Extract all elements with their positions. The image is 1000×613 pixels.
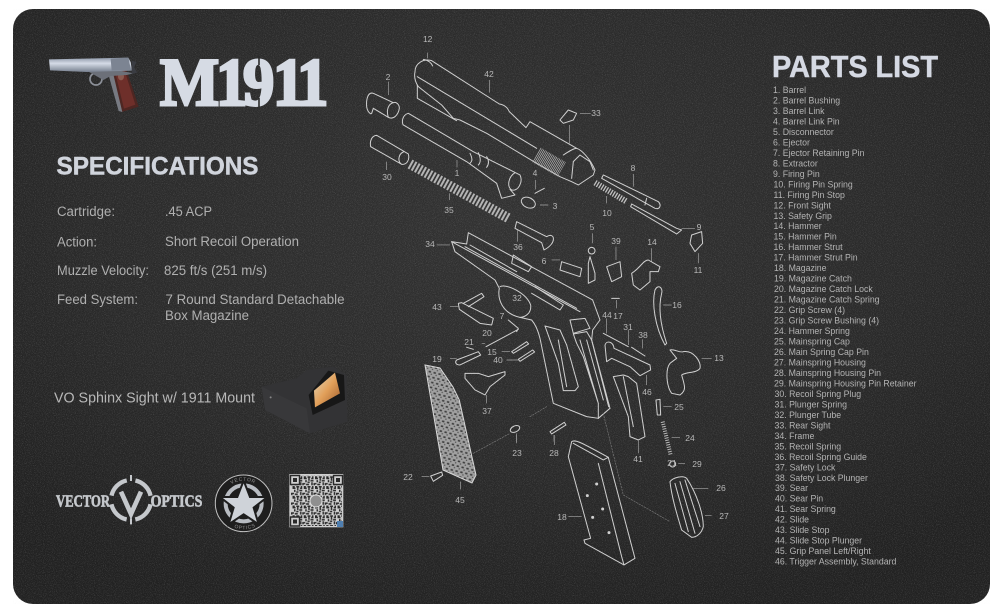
part number labels: 19 bbox=[432, 354, 442, 364]
part number labels: 5 bbox=[590, 222, 595, 232]
parts list: 31. Plunger Spring bbox=[774, 399, 847, 409]
part: recoil spring plug bbox=[370, 135, 409, 164]
part number labels: 29 bbox=[692, 459, 702, 469]
part: recoil spring guide bbox=[515, 222, 553, 250]
frame and lower parts group bbox=[450, 233, 712, 455]
part number labels bbox=[382, 34, 729, 522]
part: slide stop bbox=[458, 293, 493, 325]
part number labels: 26 bbox=[716, 483, 726, 493]
part: barrel bbox=[402, 113, 521, 198]
part number labels: 2 bbox=[386, 72, 391, 82]
parts list: 5. Disconnector bbox=[773, 127, 834, 137]
parts list: 14. Hammer bbox=[774, 221, 822, 231]
parts list: 42. Slide bbox=[775, 515, 809, 525]
parts list: 39. Sear bbox=[775, 483, 808, 493]
part number labels: 17 bbox=[613, 311, 623, 321]
part number labels: 35 bbox=[444, 205, 454, 215]
parts list: 19. Magazine Catch bbox=[774, 274, 852, 284]
parts list: 9. Firing Pin bbox=[773, 169, 820, 179]
part: barrel link pin bbox=[535, 188, 544, 193]
exploded parts diagram bbox=[367, 34, 729, 565]
part: magazine catch bbox=[456, 347, 481, 365]
part number labels: 3 bbox=[553, 201, 558, 211]
parts list: 44. Slide Stop Plunger bbox=[775, 536, 862, 546]
part number labels: 46 bbox=[642, 387, 652, 397]
part: recoil spring bbox=[410, 164, 509, 219]
part number labels: 21 bbox=[667, 458, 677, 468]
part: frame bbox=[452, 233, 610, 418]
spec: feed system: Feed System: bbox=[57, 292, 138, 307]
title: M1911: M1911 bbox=[160, 46, 328, 121]
parts list: 40. Sear Pin bbox=[775, 494, 823, 504]
parts list: 27. Mainspring Housing bbox=[774, 358, 866, 368]
part: extractor bbox=[602, 175, 660, 209]
assembly guide lines bbox=[473, 407, 670, 522]
part: grip screw bbox=[431, 472, 443, 481]
parts list: 1. Barrel bbox=[773, 85, 806, 95]
spec: feed system: Box Magazine bbox=[165, 308, 249, 323]
QR code bbox=[289, 474, 343, 527]
spec: cartridge: .45 ACP bbox=[165, 204, 212, 219]
part number labels: 32 bbox=[512, 293, 522, 303]
part: mainspring housing bbox=[670, 477, 703, 537]
parts list: 26. Main Spring Cap Pin bbox=[774, 347, 869, 357]
part number labels: 27 bbox=[719, 511, 729, 521]
spec: feed system bbox=[57, 292, 344, 323]
spec: action bbox=[57, 234, 299, 250]
logo wordmark left: VECTOR bbox=[56, 492, 111, 511]
part: retainer bbox=[670, 461, 676, 467]
heading: specifications: SPECIFICATIONS bbox=[56, 152, 258, 180]
badge: star emblem: OPTICS bbox=[234, 524, 255, 530]
leader lines bbox=[450, 300, 712, 453]
part: plunger pins bbox=[603, 298, 645, 356]
parts list: 10. Firing Pin Spring bbox=[774, 179, 853, 189]
parts list: 46. Trigger Assembly, Standard bbox=[775, 557, 897, 567]
parts list: 4. Barrel Link Pin bbox=[773, 116, 840, 126]
part number labels: 11 bbox=[694, 265, 703, 275]
part: hammer strut bbox=[654, 287, 667, 345]
part number labels: 33 bbox=[591, 108, 601, 118]
part: firing pin bbox=[631, 204, 682, 234]
part number labels: 23 bbox=[512, 448, 522, 458]
part: disconnector bbox=[588, 247, 595, 283]
part number labels: 6 bbox=[542, 256, 547, 266]
part number labels: 7 bbox=[500, 311, 505, 321]
parts list: 21. Magazine Catch Spring bbox=[774, 295, 880, 305]
spec: action: Short Recoil Operation bbox=[165, 234, 299, 249]
part number labels: 21 bbox=[464, 337, 474, 347]
leader lines bbox=[422, 435, 712, 517]
parts list: 3. Barrel Link bbox=[773, 106, 825, 116]
logo ring bbox=[111, 475, 151, 524]
part number labels: 18 bbox=[557, 512, 567, 522]
part: firing pin stop bbox=[690, 232, 703, 252]
part: mainspring cap bbox=[656, 399, 661, 415]
part number labels: 36 bbox=[513, 242, 523, 252]
badge: star emblem: VECTOR bbox=[230, 477, 256, 484]
part number labels: 15 bbox=[487, 347, 497, 357]
part number labels: 44 bbox=[602, 310, 612, 320]
part: firing pin spring bbox=[595, 183, 627, 202]
part: sear spring bbox=[613, 375, 645, 440]
parts list: 38. Safety Lock Plunger bbox=[775, 473, 868, 483]
parts list: 16. Hammer Strut bbox=[774, 242, 843, 252]
part: hammer pin bbox=[512, 342, 529, 353]
parts list: 45. Grip Panel Left/Right bbox=[775, 546, 871, 556]
logo: vector optics bbox=[56, 475, 202, 524]
part: sear bbox=[607, 262, 622, 282]
parts list: 24. Hammer Spring bbox=[774, 326, 850, 336]
part number labels: 13 bbox=[714, 353, 724, 363]
parts list: 13. Safety Grip bbox=[774, 211, 832, 221]
part: hammer bbox=[632, 260, 660, 290]
parts list: 18. Magazine bbox=[774, 263, 827, 273]
part number labels: 40 bbox=[493, 355, 503, 365]
part: slide bbox=[415, 59, 595, 185]
parts list: 7. Ejector Retaining Pin bbox=[773, 148, 865, 158]
pistol photo bbox=[49, 58, 139, 112]
part: safety grip bbox=[667, 350, 700, 395]
parts list: 15. Hammer Pin bbox=[774, 232, 837, 242]
parts list: 11. Firing Pin Stop bbox=[774, 190, 845, 200]
part number labels: 39 bbox=[611, 236, 621, 246]
part number labels: 12 bbox=[423, 34, 433, 44]
leader lines bbox=[387, 53, 698, 263]
part number labels: 25 bbox=[674, 402, 684, 412]
parts list: 17. Hammer Strut Pin bbox=[774, 253, 858, 263]
part number labels: 9 bbox=[697, 222, 702, 232]
icon: red dot sight bbox=[262, 367, 347, 433]
spec: cartridge bbox=[57, 204, 212, 219]
part number labels: 24 bbox=[685, 433, 695, 443]
part number labels: 8 bbox=[631, 163, 636, 173]
part number labels: 34 bbox=[425, 239, 435, 249]
parts list: 12. Front Sight bbox=[774, 200, 831, 210]
part: mainspring housing pin bbox=[550, 422, 566, 434]
part number labels: 42 bbox=[484, 69, 494, 79]
part: barrel link bbox=[520, 195, 537, 210]
part number labels: 28 bbox=[549, 448, 559, 458]
parts list: 36. Recoil Spring Guide bbox=[774, 452, 867, 462]
spec: feed system: 7 Round Standard Detachable bbox=[166, 292, 344, 307]
parts list: 25. Mainspring Cap bbox=[774, 336, 850, 346]
part: ejector bbox=[560, 262, 582, 277]
spec: muzzle velocity: 825 ft/s (251 m/s) bbox=[164, 263, 267, 278]
part number labels: 41 bbox=[633, 454, 643, 464]
part number labels: 4 bbox=[533, 168, 538, 178]
parts list: 37. Safety Lock bbox=[775, 462, 836, 472]
part number labels: 22 bbox=[403, 472, 413, 482]
spec: muzzle velocity bbox=[57, 263, 267, 278]
upper parts: slide and barrel group bbox=[367, 53, 703, 263]
part number labels: 43 bbox=[432, 302, 442, 312]
part: safety lock bbox=[465, 372, 505, 395]
part number labels: 16 bbox=[672, 300, 682, 310]
parts list: 23. Grip Screw Bushing (4) bbox=[774, 316, 879, 326]
parts list: 34. Frame bbox=[774, 431, 815, 441]
part number labels: 14 bbox=[647, 237, 657, 247]
part number labels: 20 bbox=[482, 328, 492, 338]
parts list: 41. Sear Spring bbox=[775, 504, 836, 514]
parts list: 20. Magazine Catch Lock bbox=[774, 284, 873, 294]
parts list: 35. Recoil Spring bbox=[774, 441, 841, 451]
parts list: 29. Mainspring Housing Pin Retainer bbox=[774, 378, 917, 388]
part: grip bushing bbox=[509, 424, 521, 434]
sight caption: VO Sphinx Sight w/ 1911 Mount bbox=[54, 390, 255, 406]
logo wordmark right: OPTICS bbox=[151, 492, 202, 511]
part: magazine bbox=[568, 441, 635, 565]
parts list: 43. Slide Stop bbox=[775, 525, 830, 535]
part: rear sight bbox=[560, 110, 577, 123]
part number labels: 10 bbox=[602, 208, 612, 218]
parts list: 2. Barrel Bushing bbox=[773, 96, 840, 106]
parts list: 8. Extractor bbox=[773, 158, 818, 168]
parts list: 22. Grip Screw (4) bbox=[774, 305, 845, 315]
part: grip panel bbox=[425, 365, 476, 483]
part number labels: 1 bbox=[455, 168, 460, 178]
part number labels: 38 bbox=[638, 330, 648, 340]
parts list: 30. Recoil Spring Plug bbox=[774, 389, 861, 399]
parts list: 6. Ejector bbox=[773, 137, 810, 147]
badge: star emblem bbox=[214, 474, 272, 532]
spec: muzzle velocity: Muzzle Velocity: bbox=[57, 263, 149, 278]
parts list: 33. Rear Sight bbox=[774, 420, 831, 430]
heading: parts list: PARTS LIST bbox=[772, 49, 938, 84]
part: hammer spring bbox=[663, 422, 671, 455]
part number labels: 45 bbox=[455, 495, 465, 505]
part: trigger assembly bbox=[605, 342, 651, 376]
part number labels: 31 bbox=[623, 322, 633, 332]
part: magazine catch lock bbox=[486, 320, 518, 347]
specifications table bbox=[57, 204, 344, 323]
part: sear pin bbox=[518, 350, 535, 361]
spec: cartridge: Cartridge: bbox=[57, 204, 115, 219]
parts list bbox=[773, 85, 917, 567]
part number labels: 30 bbox=[382, 172, 392, 182]
part number labels: 37 bbox=[482, 406, 492, 416]
parts list: 32. Plunger Tube bbox=[774, 410, 841, 420]
part: barrel bushing bbox=[367, 93, 399, 118]
parts list: 28. Mainspring Housing Pin bbox=[774, 368, 881, 378]
magazine and housing group bbox=[422, 407, 712, 565]
spec: action: Action: bbox=[57, 234, 97, 250]
